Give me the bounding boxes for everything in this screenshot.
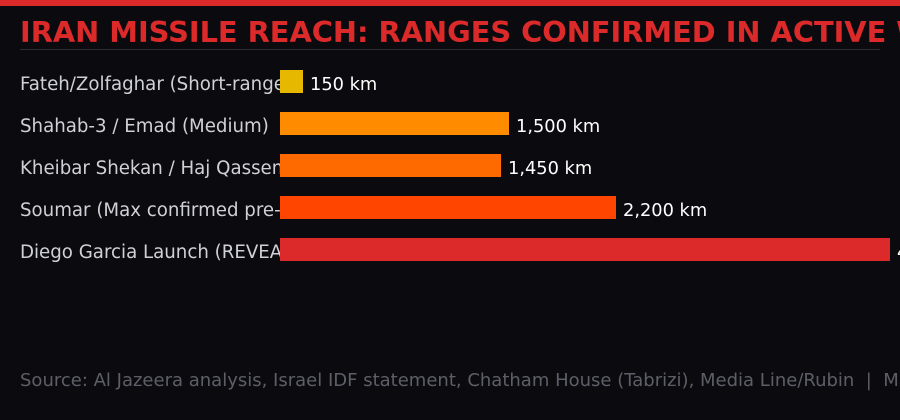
bar chart xyxy=(20,70,900,263)
row: Fateh: 150 km xyxy=(310,74,377,95)
row: Soumar xyxy=(20,196,707,221)
row: Soumar: 2,200 km xyxy=(623,200,707,221)
row: Shahab-3: 1,500 km xyxy=(516,116,600,137)
row: Kheibar xyxy=(20,154,592,179)
row: Kheibar: 1,450 km xyxy=(508,158,592,179)
row: Shahab-3: Shahab-3 / Emad (Medium) xyxy=(20,116,269,137)
top accent bar xyxy=(0,0,900,6)
row: Shahab-3 xyxy=(20,112,600,137)
row: Diego Garcia xyxy=(20,238,900,263)
row: Fateh xyxy=(20,70,377,95)
